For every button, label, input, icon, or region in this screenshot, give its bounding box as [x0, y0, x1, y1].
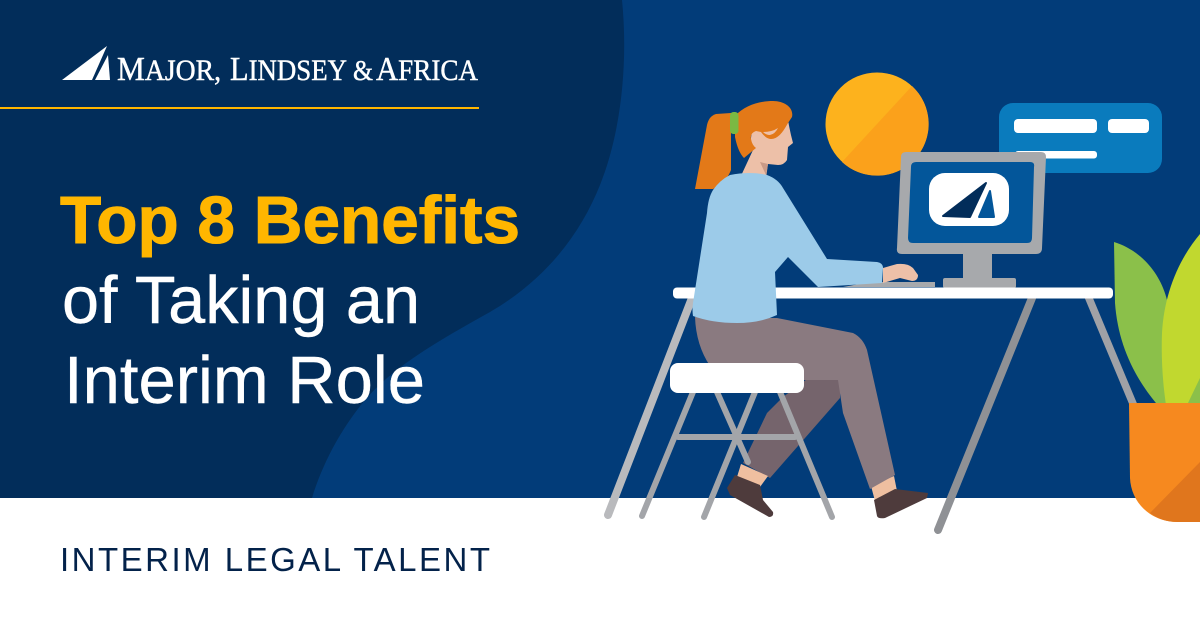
- logo wordmark: LINDSEY: [230, 51, 347, 88]
- neck shadow: [760, 162, 768, 175]
- stool legs: [642, 392, 832, 517]
- hair tie: [730, 112, 738, 134]
- monitor stand: [963, 250, 992, 280]
- stool: [642, 392, 832, 517]
- stool seat: [670, 363, 804, 393]
- screen logo sail: [943, 183, 994, 217]
- logo wordmark: AFRICA: [376, 51, 478, 88]
- logo wordmark: &: [353, 56, 373, 87]
- monitor: [897, 152, 1046, 288]
- plant right leaf: [1162, 234, 1200, 405]
- back ankle: [737, 464, 768, 487]
- screen logo tile: [929, 173, 1009, 226]
- logo wordmark: MAJOR,: [117, 51, 221, 88]
- hair: [735, 101, 792, 158]
- person: [692, 101, 928, 518]
- keyboard: [843, 282, 935, 287]
- front shoe: [874, 489, 928, 518]
- plant pot: [1129, 403, 1200, 522]
- dark blue wave panel: [0, 0, 624, 498]
- back shoe: [727, 475, 773, 517]
- monitor screen: [908, 162, 1034, 243]
- title line 1: Top 8 Benefits: [60, 183, 520, 258]
- sweater: [692, 173, 883, 323]
- monitor frame: [897, 152, 1046, 254]
- plant left leaf: [1114, 242, 1172, 410]
- logo: [62, 46, 478, 88]
- category label: INTERIM LEGAL TALENT: [60, 541, 490, 578]
- person back leg: [743, 379, 840, 478]
- title: [60, 183, 520, 418]
- front ankle: [871, 476, 897, 501]
- logo sail mark: [62, 46, 110, 80]
- chat bubble: [999, 103, 1162, 173]
- desk back legs: [608, 298, 1032, 530]
- hand: [883, 264, 918, 283]
- title line 2: of Taking an: [62, 263, 420, 338]
- desk top: [673, 288, 1113, 298]
- eye patch: [763, 128, 778, 135]
- logo wordmark: [117, 51, 478, 88]
- title line 3: Interim Role: [64, 343, 425, 418]
- ponytail: [695, 113, 731, 189]
- plant: [1114, 234, 1200, 522]
- far table leg: [1088, 296, 1134, 406]
- neck and face: [740, 120, 793, 178]
- front leg: [695, 317, 895, 489]
- icon: orange sun circle: [826, 72, 929, 176]
